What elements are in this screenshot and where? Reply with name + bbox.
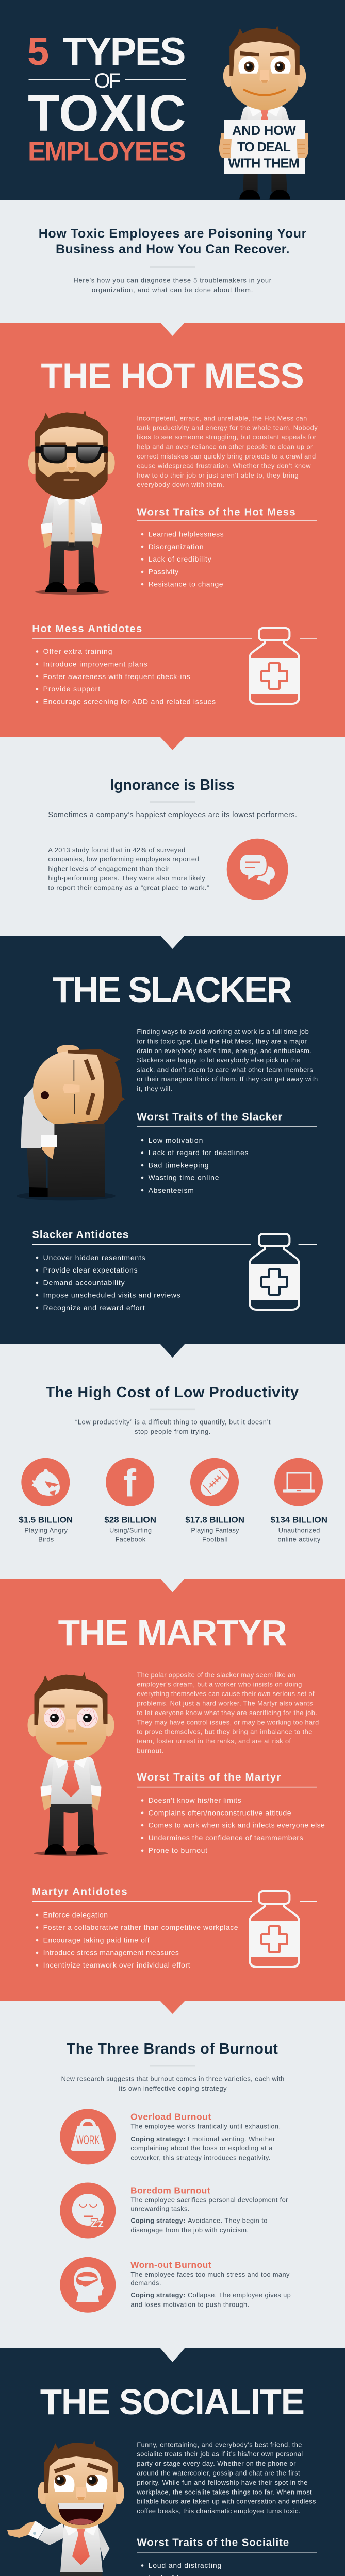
description: employer’s dream, but a worker who insists on doing — [137, 1681, 302, 1688]
panel: the slacker — [0, 936, 345, 1344]
icon: medicine bottle — [249, 1234, 300, 1310]
description: help and an over-reliance on other people to clean up or — [137, 443, 313, 450]
title: TOXIC — [28, 84, 186, 142]
antidotes: Encourage taking paid time off — [43, 1936, 150, 1944]
stat: facebook: f — [123, 1462, 137, 1505]
worst traits: Worst Traits of the Hot Mess — [137, 506, 295, 518]
boredom burnout — [130, 2185, 288, 2234]
antidotes: Impose unscheduled visits and reviews — [43, 1291, 180, 1299]
antidotes: Foster awareness with frequent check-ins — [43, 672, 190, 681]
worn-out burnout: Worn-out Burnout — [130, 2260, 211, 2270]
overload burnout: Coping strategy: — [130, 2135, 185, 2143]
description: likes to see someone struggling, but constant appeals for — [137, 433, 317, 441]
panel: the three brands of burnout — [60, 2001, 291, 2313]
description: coffee breaks, this charismatic employee turns toxic. — [137, 2507, 300, 2515]
boredom burnout: Coping strategy: — [130, 2216, 185, 2224]
description: party or stage every day. Whether on the phone or — [137, 2460, 296, 2467]
worst traits: Worst Traits of the Slacker — [137, 1111, 282, 1123]
study text: companies, low performing employees reported — [48, 855, 199, 863]
subheading: “Low productivity” is a difficult thing to quantify, but it doesn’t — [75, 1418, 271, 1426]
icon: worn-out brain — [60, 2257, 116, 2313]
subheading — [75, 1418, 271, 1435]
antidotes: Incentivize teamwork over individual effort — [43, 1961, 190, 1969]
antidotes: Provide support — [43, 685, 100, 693]
subheading: Sometimes a company’s happiest employees are its lowest performers. — [48, 811, 297, 819]
antidotes: Slacker Antidotes — [32, 1229, 128, 1241]
description: billable hours are taken up with conversation and endless — [137, 2498, 316, 2505]
heading: how toxic employees: Business and How You Can Recover. — [56, 242, 290, 257]
heading: the slacker: THE SLACKER — [53, 970, 292, 1010]
subheading: New research suggests that burnout comes in three varieties, each with — [61, 2075, 284, 2082]
stat: angry birds: $1.5 BILLION — [19, 1515, 73, 1525]
worst traits: Comes to work when sick and infects everyone else — [149, 1821, 325, 1829]
antidotes — [32, 1886, 317, 1969]
panel: the high cost of low productivity — [19, 1344, 327, 1544]
description: Incompetent, erratic, and unreliable, the Hot Mess can — [137, 414, 307, 422]
worst traits: Lack of credibility — [149, 555, 211, 563]
worst traits: Disorganization — [149, 543, 204, 551]
worst traits: Learned helplessness — [149, 530, 224, 538]
heading: how toxic employees: How Toxic Employees are Poisoning Your — [39, 227, 307, 241]
antidotes: Recognize and reward effort — [43, 1303, 145, 1312]
description: burnout. — [137, 1747, 163, 1755]
arrow — [160, 737, 185, 750]
arrow — [160, 2001, 185, 2014]
stat: facebook: Facebook — [116, 1536, 146, 1544]
worst traits: Lack of regard for deadlines — [149, 1148, 249, 1157]
overload burnout: The employee works frantically until exhaustion. — [130, 2123, 281, 2130]
boredom burnout: Avoidance. They begin to — [188, 2216, 267, 2224]
arrow — [160, 323, 185, 336]
boredom burnout: disengage from the job with cynicism. — [130, 2226, 249, 2234]
stat: unauthorized online activity: online activity — [277, 1536, 321, 1544]
stat: facebook — [104, 1458, 156, 1544]
stat: fantasy football: Playing Fantasy — [191, 1526, 239, 1534]
stat: fantasy football: Football — [202, 1536, 228, 1544]
description: slack, and don’t seem to care what other team members — [137, 1066, 313, 1074]
description: Finding ways to avoid working at work is a full time job — [137, 1028, 309, 1036]
description: for this toxic type. Like the Hot Mess, they are a major — [137, 1037, 307, 1045]
icon: medicine bottle — [249, 628, 300, 704]
icon: bearded character with sunglasses — [28, 410, 115, 595]
description: correct mistakes can quickly bring projects to a crawl and — [137, 452, 316, 460]
description: tank productivity and energy for the whole team. Nobody — [137, 424, 318, 432]
sign: AND HOW — [232, 124, 297, 138]
description: cause widespread frustration. Whether they don’t know — [137, 462, 311, 469]
study text: A 2013 study found that in 42% of surveyed — [48, 846, 185, 854]
antidotes: Offer extra training — [43, 647, 112, 655]
antidotes — [32, 1229, 317, 1312]
worst traits: Wasting time online — [149, 1174, 219, 1182]
intro text: organization, and what can be done about them. — [92, 286, 253, 294]
description: socialite treats their job as if it’s his/her own personal — [137, 2450, 303, 2458]
overload burnout: complaining about the boss or exploding at a — [130, 2144, 273, 2152]
description: workplace, the socialite takes things too far. When most — [136, 2488, 312, 2496]
worst traits: Undermines the confidence of teammembers — [149, 1834, 303, 1842]
description: around the watercooler, gossip and chat are the first — [137, 2469, 300, 2477]
icon: exhausted character with bloodshot eyes — [28, 1672, 114, 1856]
worst traits: Absenteeism — [149, 1186, 194, 1194]
stat: facebook: Using/Surfing — [109, 1526, 152, 1534]
title: EMPLOYEES — [28, 137, 186, 167]
icon: work weight — [60, 2109, 116, 2164]
worst traits — [137, 1111, 317, 1194]
heading: The High Cost of Low Productivity — [46, 1384, 299, 1401]
antidotes: Encourage screening for ADD and related issues — [43, 697, 216, 705]
description: to let everyone know what they are sacrificing for the job. — [137, 1709, 317, 1717]
antidotes: Introduce improvement plans — [43, 659, 147, 668]
icon: sleeping face — [60, 2182, 116, 2238]
boredom burnout: Boredom Burnout — [130, 2185, 210, 2195]
antidotes: Hot Mess Antidotes — [32, 623, 142, 635]
panel: hero — [0, 0, 345, 200]
heading: The Three Brands of Burnout — [67, 2041, 278, 2057]
description: everything themselves can cause their own serious set of — [137, 1690, 315, 1698]
worst traits — [137, 1771, 325, 1854]
arrow — [160, 1579, 185, 1592]
worst traits — [137, 2536, 317, 2576]
intro text — [73, 276, 272, 294]
stat: unauthorized online activity: $134 BILLION — [270, 1515, 327, 1525]
antidotes: Uncover hidden resentments — [43, 1253, 145, 1262]
heading: Ignorance is Bliss — [110, 777, 235, 793]
description: They may have control issues, or may be working too hard — [137, 1718, 319, 1726]
study text: higher levels of engagement than their — [48, 865, 170, 873]
description — [137, 1671, 319, 1755]
boredom burnout: The employee sacrifices personal development for — [130, 2196, 288, 2204]
antidotes: Martyr Antidotes — [32, 1886, 127, 1898]
sign: WITH THEM — [228, 157, 300, 171]
heading: the hot mess: THE HOT MESS — [41, 355, 304, 396]
stat: angry birds: Birds — [38, 1536, 54, 1544]
sign — [224, 120, 305, 174]
description — [137, 414, 318, 488]
heading: the martyr: THE MARTYR — [58, 1613, 287, 1653]
subheading: stop people from trying. — [135, 1428, 210, 1435]
worn-out burnout: demands. — [130, 2279, 161, 2287]
intro text: Here’s how you can diagnose these 5 troublemakers in your — [73, 276, 272, 284]
description: it, they will. — [137, 1084, 172, 1092]
worst traits: Complains often/nonconstructive attitude — [149, 1808, 291, 1817]
title — [27, 30, 186, 167]
panel: the martyr — [0, 1579, 345, 2001]
worn-out burnout: and loses motivation to push through. — [130, 2300, 249, 2308]
worn-out burnout: The employee faces too much stress and too many — [130, 2270, 290, 2278]
worst traits: Prone to burnout — [149, 1846, 207, 1854]
description: The polar opposite of the slacker may seem like an — [137, 1671, 295, 1679]
icon: chat bubbles — [227, 839, 288, 900]
icon: sleeping slumped character — [17, 1045, 125, 1200]
title: OF — [94, 70, 121, 92]
subheading — [61, 2075, 284, 2092]
description — [137, 1028, 318, 1092]
sign: TO DEAL — [237, 140, 291, 155]
worst traits: Resistance to change — [149, 580, 223, 588]
stat: angry birds — [19, 1458, 73, 1544]
worst traits: Low motivation — [149, 1136, 203, 1144]
stat: facebook: $28 BILLION — [104, 1515, 156, 1525]
worn-out burnout — [130, 2260, 291, 2308]
worst traits: Doesn’t know his/her limits — [149, 1796, 241, 1804]
panel: intro — [39, 227, 307, 294]
subheading: its own ineffective coping strategy — [119, 2084, 227, 2092]
antidotes: Demand accountability — [43, 1278, 125, 1286]
description — [136, 2441, 316, 2515]
arrow — [160, 1344, 185, 1358]
worst traits: Worst Traits of the Socialite — [137, 2536, 289, 2548]
worst traits: Passivity — [149, 567, 178, 575]
stat: unauthorized online activity: Unauthorized — [278, 1526, 320, 1534]
title: TYPES — [63, 30, 186, 74]
description: Funny, entertaining, and everybody’s best friend, the — [137, 2441, 302, 2448]
worn-out burnout: Coping strategy: — [130, 2291, 185, 2299]
overload burnout: coworker, this strategy introduces negativity. — [130, 2154, 270, 2162]
panel: ignorance is bliss — [48, 737, 297, 900]
panel: the hot mess — [0, 323, 345, 737]
title: 5 — [27, 30, 49, 74]
overload burnout: Overload Burnout — [130, 2112, 211, 2122]
description: drain on everybody else’s time, energy, and enthusiasm. — [137, 1047, 311, 1055]
description: how to do their job or just aren’t able to, they bring — [137, 471, 299, 479]
stat: unauthorized online activity — [270, 1458, 327, 1544]
worst traits: Bad timekeeping — [149, 1161, 209, 1169]
antidotes: Foster a collaborative rather than competitive workplace — [43, 1923, 238, 1931]
worst traits: Loud and distracting — [149, 2561, 221, 2569]
worst traits: Worst Traits of the Martyr — [137, 1771, 281, 1783]
panel: the socialite — [0, 2348, 345, 2576]
heading: how toxic employees — [39, 227, 307, 257]
arrow — [160, 936, 185, 949]
heading: the socialite: THE SOCIALITE — [40, 2382, 305, 2422]
overload burnout: Emotional venting. Whether — [188, 2135, 275, 2143]
icon: laughing character with raised hand — [7, 2440, 124, 2576]
description: team, foster unrest in the ranks, and are at risk of — [137, 1737, 291, 1745]
icon: work weight: WORK — [76, 2133, 100, 2147]
antidotes: Introduce stress management measures — [43, 1948, 179, 1957]
stat: angry birds: Playing Angry — [24, 1526, 68, 1534]
icon: sleeping face: Zz — [91, 2217, 104, 2230]
description: to prove themselves, but they bring an imbalance to the — [137, 1728, 312, 1736]
stat: fantasy football: $17.8 BILLION — [185, 1515, 244, 1525]
antidotes: Provide clear expectations — [43, 1266, 138, 1274]
antidotes — [32, 623, 317, 705]
description: priority. While fun and fellowship have their spot in the — [137, 2479, 307, 2486]
study text — [48, 846, 209, 891]
study text: to report their company as a “great place to work.” — [48, 884, 209, 891]
icon: medicine bottle — [249, 1891, 300, 1967]
worn-out burnout: Collapse. The employee gives up — [188, 2291, 291, 2299]
description: Slackers are happy to let everybody else pick up the — [137, 1056, 300, 1064]
study text: high-performing peers. They were also more likely — [48, 874, 205, 882]
overload burnout — [130, 2112, 281, 2162]
icon: smiling employee holding a sign — [219, 25, 308, 199]
description: everybody down with them. — [137, 481, 224, 488]
arrow — [160, 2348, 185, 2362]
worst traits — [137, 506, 317, 588]
description: or their managers think of them. If they can get away with — [137, 1075, 318, 1083]
antidotes: Enforce delegation — [43, 1911, 108, 1919]
stat: fantasy football — [185, 1458, 244, 1544]
boredom burnout: unrewarding tasks. — [130, 2205, 189, 2212]
description: problems. Not just a hard worker, The Martyr also wants — [137, 1699, 313, 1707]
